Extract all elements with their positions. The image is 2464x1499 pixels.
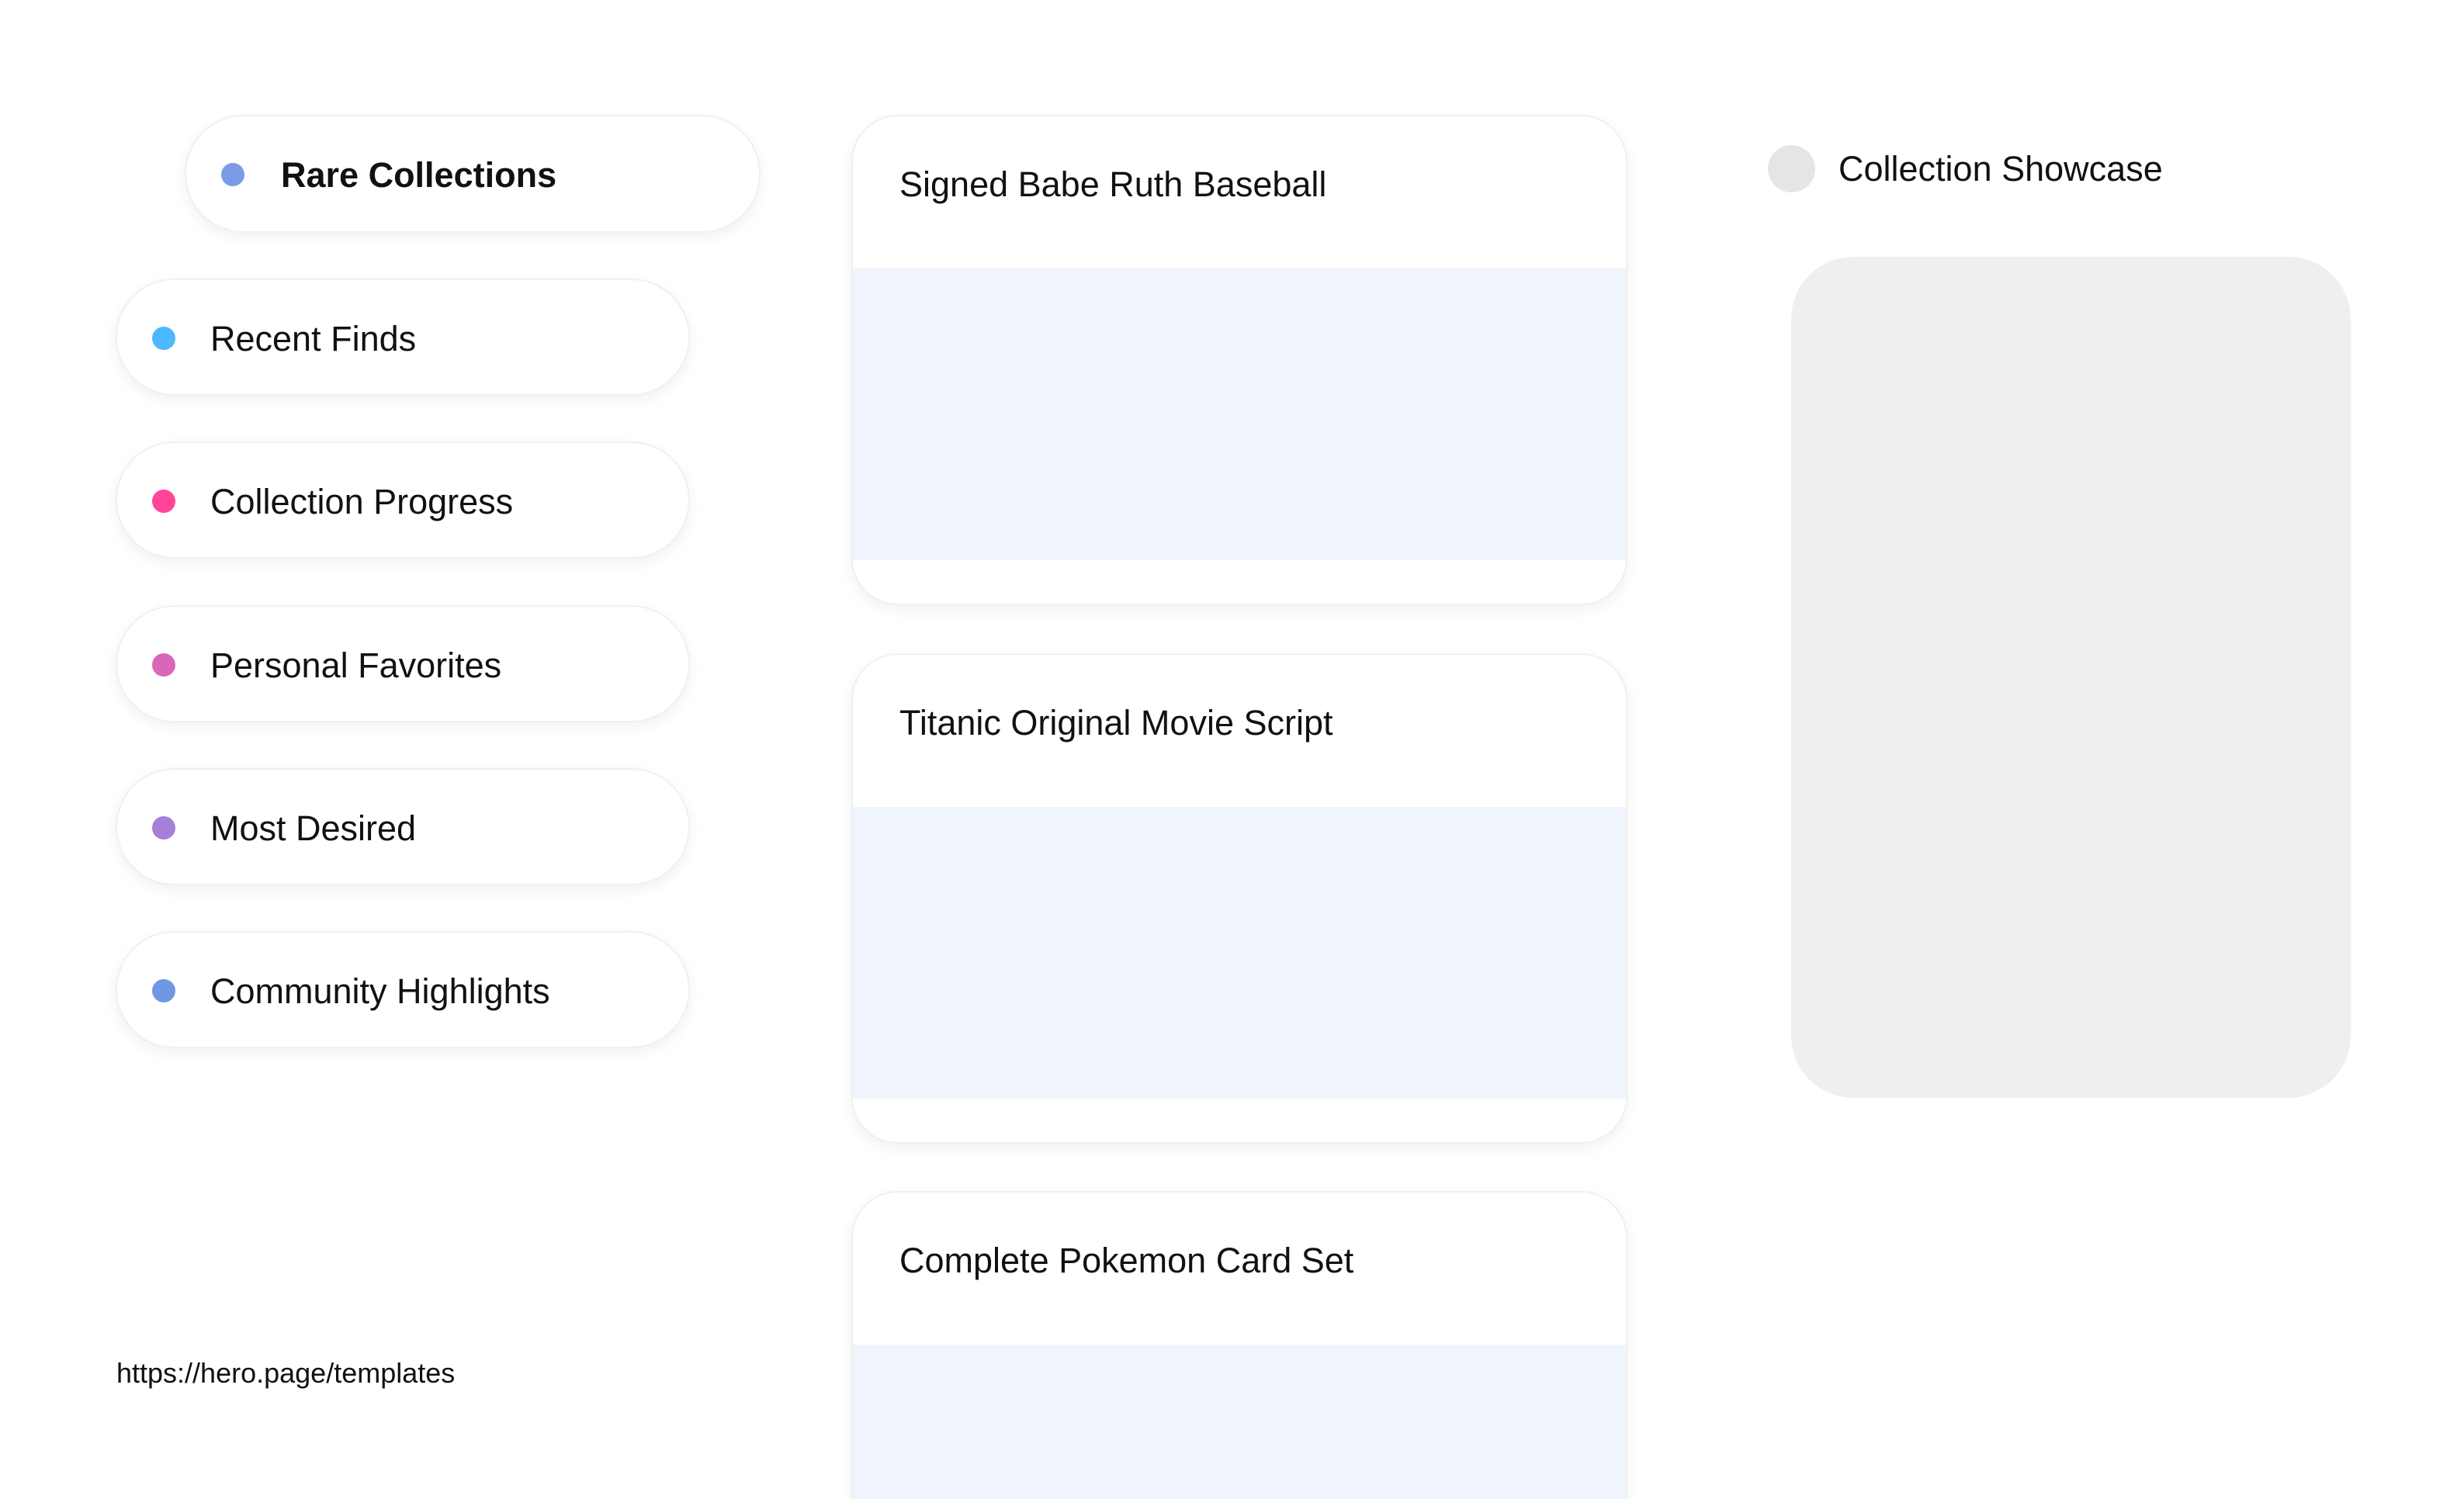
label: Rare Collections: [281, 155, 556, 195]
nav: Community Highlights: [116, 931, 690, 1048]
icon: dot: [152, 653, 175, 677]
nav: Rare Collections: [185, 115, 761, 233]
icon: dot: [152, 490, 175, 513]
footer url: https://hero.page/templates: [116, 1357, 455, 1389]
card: Titanic Original Movie Script: [851, 653, 1627, 1144]
icon: dot: [152, 816, 175, 840]
icon: dot: [221, 163, 244, 186]
label: Recent Finds: [210, 319, 416, 358]
nav: Recent Finds: [116, 279, 690, 396]
card: Complete Pokemon Card Set: [851, 1191, 1627, 1499]
nav: Most Desired: [116, 768, 690, 885]
icon: gray circle: [1768, 145, 1815, 192]
image placeholder: [853, 268, 1626, 560]
card: Signed Babe Ruth Baseball: [851, 115, 1627, 605]
label: Most Desired: [210, 808, 416, 848]
card title: Signed Babe Ruth Baseball: [899, 164, 1326, 204]
image placeholder: [853, 807, 1626, 1099]
image placeholder: [853, 1345, 1626, 1499]
nav: Personal Favorites: [116, 605, 690, 722]
showcase panel: [1791, 257, 2351, 1098]
nav: Collection Progress: [116, 441, 690, 559]
label: Community Highlights: [210, 971, 550, 1011]
card title: Titanic Original Movie Script: [899, 703, 1333, 743]
card title: Complete Pokemon Card Set: [899, 1241, 1353, 1280]
icon: dot: [152, 327, 175, 350]
label: Personal Favorites: [210, 646, 501, 685]
showcase header: [1768, 145, 2163, 192]
heading: Collection Showcase: [1838, 149, 2163, 189]
icon: dot: [152, 979, 175, 1002]
label: Collection Progress: [210, 482, 513, 521]
